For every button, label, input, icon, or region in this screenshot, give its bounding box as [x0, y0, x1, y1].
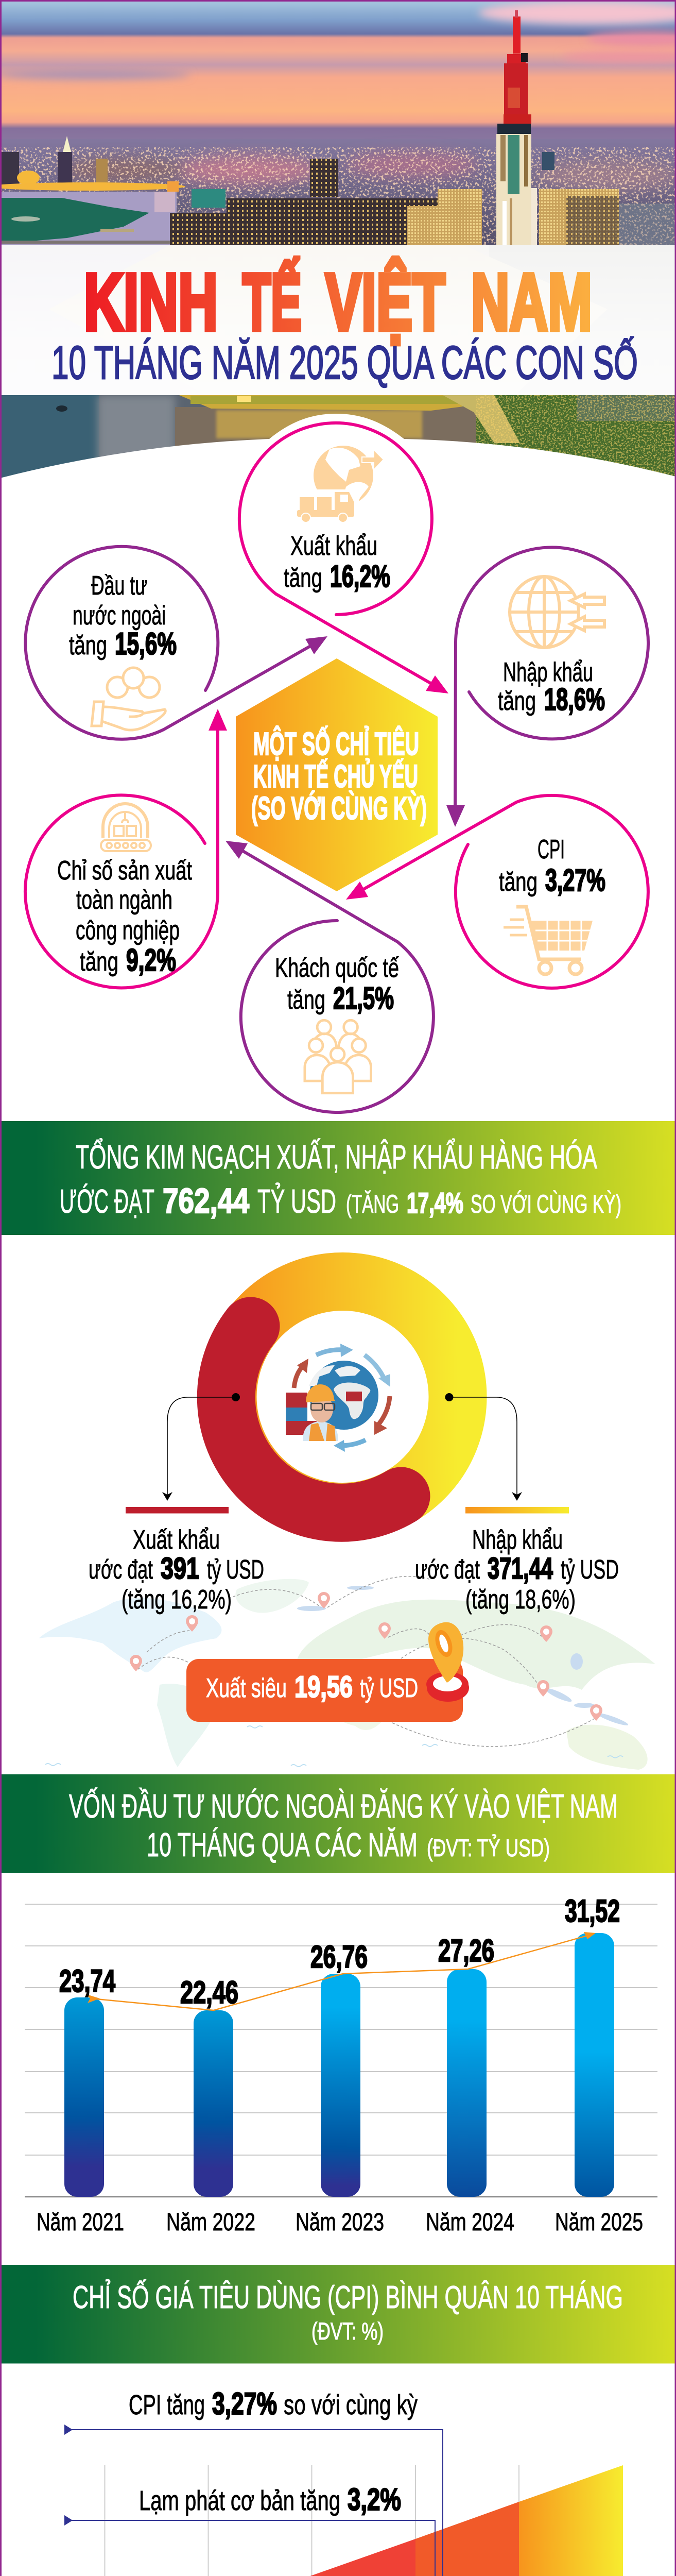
label: industrial production — [57, 856, 192, 977]
year labels: Năm 2024 — [426, 2209, 514, 2236]
label: CPI: CPI — [538, 835, 565, 865]
label: foreign investment: nước ngoài — [73, 601, 166, 631]
label: visitors: tăng — [287, 985, 325, 1015]
circle: exports — [239, 423, 448, 693]
icon: factory gear — [101, 804, 151, 851]
circle: industrial production index — [25, 709, 227, 988]
label: CPI — [499, 835, 605, 897]
label: imports — [498, 657, 605, 717]
callout: exports: tỷ USD — [207, 1555, 264, 1585]
year labels: Năm 2022 — [166, 2209, 255, 2236]
bar values: 26,76 — [310, 1939, 368, 1974]
label: imports: Nhập khẩu — [503, 657, 593, 687]
label: foreign investment: Đầu tư — [91, 571, 147, 601]
bar values: 31,52 — [565, 1893, 620, 1928]
callout: imports: Nhập khẩu — [472, 1525, 563, 1555]
year labels — [37, 2209, 643, 2236]
heading: total trade: 762,44 — [163, 1181, 249, 1221]
icon: people — [305, 1020, 371, 1093]
marker: core inflation 3.2% — [64, 2482, 440, 2576]
label: CPI: tăng — [499, 867, 538, 897]
panel: key indicators cycle — [25, 423, 648, 1112]
heading: CPI: (ĐVT: %) — [311, 2317, 384, 2345]
title: Kinh tế Việt Nam: VIỆT — [325, 258, 445, 347]
marker: CPI 3.27% — [64, 2386, 448, 2576]
icon: shopping cart — [504, 907, 593, 974]
heading: total trade: ƯỚC ĐẠT — [60, 1182, 154, 1220]
label: industrial production: tăng — [80, 947, 118, 977]
title: Kinh tế Việt Nam: KINH — [84, 258, 218, 347]
icon: hand with coins — [92, 668, 165, 730]
title: Kinh tế Việt Nam — [84, 258, 592, 347]
callout: imports — [415, 1393, 619, 1615]
icon: globe and truck — [294, 446, 384, 523]
heading: total trade: 17,4% — [407, 1187, 463, 1219]
year labels: Năm 2021 — [37, 2209, 124, 2236]
year labels: Năm 2025 — [555, 2209, 643, 2236]
marker: CPI 3.27%: 3,27% — [212, 2386, 277, 2421]
icon: globe with inbound arrows — [510, 577, 604, 648]
label: industrial production: Chỉ số sản xuất — [57, 856, 192, 886]
label: visitors — [275, 953, 399, 1015]
heading: total trade: (TĂNG — [346, 1190, 399, 1218]
callout: imports: ước đạt — [415, 1555, 480, 1585]
hero photo: Ho Chi Minh City skyline — [0, 0, 676, 483]
heading: total trade — [2, 1121, 676, 1235]
central hexagon: (SO VỚI CÙNG KỲ) — [251, 791, 427, 826]
label: foreign investment: tăng — [69, 631, 107, 660]
callout: exports: 391 — [161, 1552, 199, 1585]
label: exports: 16,2% — [330, 559, 390, 594]
marker: CPI 3.27%: so với cùng kỳ — [284, 2389, 418, 2420]
label: imports: tăng — [498, 686, 536, 716]
central hexagon: MỘT SỐ CHỈ TIÊU — [253, 726, 419, 762]
year labels: Năm 2023 — [296, 2209, 384, 2236]
heading: FDI — [2, 1774, 676, 1873]
icon: location pin — [426, 1622, 469, 1702]
bar values: 27,26 — [438, 1933, 494, 1968]
marker: core inflation 3.2%: 3,2% — [348, 2482, 401, 2517]
heading: FDI: 10 THÁNG QUA CÁC NĂM — [147, 1826, 418, 1863]
heading: CPI — [2, 2265, 676, 2364]
callout: trade surplus: 19,56 — [294, 1670, 353, 1704]
label: visitors: Khách quốc tế — [275, 953, 399, 983]
heading: total trade: TỶ USD — [257, 1182, 336, 1220]
callout: trade surplus: tỷ USD — [360, 1673, 418, 1703]
landmark 81 tower — [496, 10, 537, 245]
label: industrial production: công nghiệp — [76, 916, 180, 945]
circle: foreign investment — [25, 547, 327, 739]
title: Kinh tế Việt Nam: TẾ — [242, 258, 302, 347]
world map background — [39, 1577, 655, 1770]
callout: exports: Xuất khẩu — [133, 1525, 220, 1555]
bar values — [59, 1893, 620, 2010]
wedge chart: CPI — [64, 2386, 631, 2576]
label: exports: Xuất khẩu — [290, 531, 377, 561]
heading: FDI: (ĐVT: TỶ USD) — [427, 1834, 550, 1861]
label: imports: 18,6% — [544, 682, 605, 717]
callout: imports: (tăng 18,6%) — [465, 1585, 576, 1615]
circle: international visitors — [226, 841, 434, 1112]
label: visitors: 21,5% — [333, 981, 394, 1015]
circle: imports — [446, 547, 648, 827]
callout: exports — [89, 1393, 264, 1615]
marker: CPI 3.27%: CPI tăng — [129, 2389, 205, 2420]
label: foreign investment — [69, 571, 177, 661]
title: Kinh tế Việt Nam: NAM — [471, 258, 592, 347]
bar chart: FDI by year — [25, 1893, 657, 2236]
label: industrial production: toàn ngành — [76, 885, 172, 915]
label: foreign investment: 15,6% — [115, 626, 177, 661]
label: industrial production: 9,2% — [126, 943, 176, 977]
callout: trade surplus — [186, 1622, 469, 1722]
circle: CPI — [346, 795, 648, 988]
label: exports: tăng — [284, 563, 322, 593]
callout: imports: tỷ USD — [561, 1555, 619, 1585]
callout: exports: ước đạt — [89, 1555, 153, 1585]
central hexagon: KINH TẾ CHỦ YẾU — [253, 759, 418, 794]
donut chart: exports vs imports — [226, 1282, 458, 1513]
title band — [2, 245, 676, 395]
label: CPI: 3,27% — [545, 863, 605, 897]
marker: core inflation 3.2%: Lạm phát cơ bản tăng — [139, 2485, 340, 2516]
central hexagon — [236, 658, 438, 891]
bar values: 22,46 — [180, 1975, 238, 2010]
callout: exports: (tăng 16,2%) — [122, 1585, 232, 1615]
callout: trade surplus: Xuất siêu — [206, 1673, 287, 1703]
bar values: 23,74 — [59, 1963, 115, 1998]
label: exports — [284, 531, 390, 594]
centre illustration: logistics worker and globe — [286, 1344, 390, 1452]
trend line — [85, 1932, 596, 2010]
callout: imports: 371,44 — [488, 1552, 553, 1585]
